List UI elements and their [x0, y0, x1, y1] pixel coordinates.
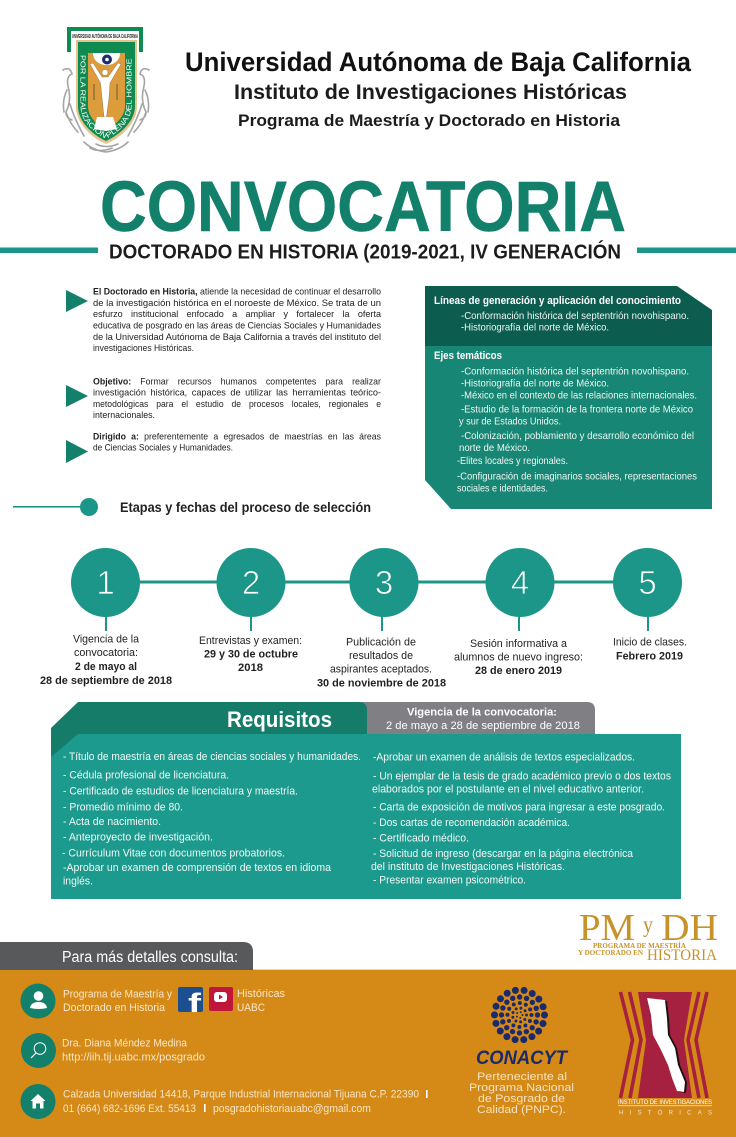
step 4: 4	[511, 564, 529, 601]
logo: PMyDH	[578, 907, 718, 964]
text: direccion: posgradohistoriauabc@gmail.com	[213, 1103, 371, 1115]
text: contacto: Dra. Diana Méndez Medina	[62, 1038, 188, 1050]
text: dirigido: de Ciencias Sociales y Humanidades.	[93, 442, 233, 452]
text: doctorado: investigaciones Históricas.	[93, 343, 194, 353]
text: dirigido: Dirigido a: preferentemente a egresados de maestrías en las áreas	[93, 432, 381, 442]
logo: instituto: HISTÓRICAS	[619, 1110, 712, 1116]
step 1	[40, 548, 172, 687]
footer	[0, 942, 736, 1137]
timeline	[40, 548, 687, 690]
step 1: 28 de septiembre de 2018	[40, 675, 172, 687]
icon: arrow	[66, 385, 88, 407]
logo: CONACYT: Calidad (PNPC).	[477, 1104, 566, 1116]
list: ejes: norte de México.	[459, 442, 530, 454]
text: doctorado	[93, 286, 382, 353]
text: direccion: 01 (664) 682-1696 Ext. 55413	[63, 1103, 196, 1115]
text: doctorado: esfurzo institucional enfocado a ampliar y fortalecer la oferta	[93, 309, 382, 319]
step 5: Inicio de clases.	[613, 636, 687, 648]
step 3: resultados de	[349, 650, 413, 662]
title: CONVOCATORIA	[100, 168, 626, 247]
text: objetivo: investigación histórica, capaces de utilizar las herramientas teórico-	[93, 388, 381, 398]
list: ejes	[457, 366, 697, 494]
tab: vigencia	[360, 702, 595, 735]
program name: Programa de Maestría y Doctorado en Historia	[238, 111, 621, 130]
text: contacto	[62, 1038, 205, 1064]
step 5: 5	[638, 564, 657, 601]
logo: CONACYT: CONACYT	[476, 1048, 568, 1069]
step 4	[454, 548, 583, 677]
text: doctorado: de la Universidad Autónoma de Baja California a través del instituto del	[93, 332, 381, 342]
list: lineas	[461, 310, 689, 334]
list: right requirements: - Carta de exposición de motivos para ingresar a este posgrado.	[373, 802, 665, 814]
list: ejes: -Colonización, poblamiento y desarrollo económico del	[461, 430, 694, 442]
icon: facebook	[178, 987, 203, 1018]
section heading: etapas: Etapas y fechas del proceso de selección	[120, 500, 371, 515]
list: ejes: -Conformación histórica del septentrión novohispano.	[461, 366, 689, 378]
logo: instituto: INSTITUTO DE INVESTIGACIONES	[618, 1099, 712, 1106]
heading: lineas: Líneas de generación y aplicación del conocimiento	[434, 295, 681, 307]
text: objetivo: metodológicas para el estudio de procesos locales, regionales e	[93, 399, 381, 409]
list: right requirements: - Un ejemplar de la tesis de grado académico previo o dos textos	[373, 770, 671, 782]
list: left requirements: - Acta de nacimiento.	[63, 816, 161, 828]
icon: facebook: f	[188, 988, 202, 1018]
icon: home	[20, 1084, 56, 1119]
step 3: 30 de noviembre de 2018	[317, 678, 446, 690]
step 1: 2 de mayo al	[75, 661, 137, 673]
list: left requirements: - Promedio mínimo de 80.	[63, 802, 183, 814]
logo: CONACYT: de Posgrado de	[478, 1093, 565, 1105]
icon: UABC shield logo: UNIVERSIDAD AUTÓNOMA DE BAJA CALIFORNIA	[72, 32, 138, 40]
logo: CONACYT	[469, 990, 574, 1116]
list: ejes: -Elites locales y regionales.	[457, 455, 568, 467]
list: ejes: -Historiografía del norte de México.	[461, 378, 609, 390]
text: programa	[63, 988, 172, 1014]
step 3: 3	[375, 564, 393, 601]
text: historicas: Históricas	[237, 988, 285, 1000]
step 4: 28 de enero 2019	[475, 665, 562, 677]
list: left requirements: - Certificado de estudios de licenciatura y maestría.	[63, 786, 298, 798]
list: ejes: -Estudio de la formación de la frontera norte de México	[461, 404, 693, 416]
list: right requirements: -Aprobar un examen de análisis de textos especializados.	[373, 752, 635, 764]
logo: PMyDH: DH	[661, 907, 718, 949]
step 3: aspirantes aceptados.	[330, 664, 432, 676]
logo: PMyDH: PM	[579, 907, 635, 949]
list: ejes: -México en el contexto de las relaciones internacionales.	[461, 390, 697, 402]
logo: instituto	[618, 992, 712, 1116]
step 1: Vigencia de la	[73, 634, 140, 646]
step 3: Publicación de	[346, 636, 416, 648]
institute name: Instituto de Investigaciones Históricas	[234, 81, 627, 104]
logo: PMyDH: HISTORIA	[647, 947, 717, 964]
tab: mas detalles	[0, 942, 253, 970]
step 2: 2	[242, 564, 260, 601]
logo: PMyDH: Y DOCTORADO EN	[578, 948, 644, 957]
logo: PMyDH: y	[643, 912, 653, 937]
list: right requirements: del instituto de Investigaciones Históricas.	[371, 861, 565, 873]
step 4: alumnos de nuevo ingreso:	[454, 652, 583, 664]
text: dirigido	[93, 432, 381, 452]
text: direccion: Calzada Universidad 14418, Parque Industrial Internacional Tijuana C.P. 22390	[63, 1088, 419, 1100]
heading: requisitos	[51, 702, 367, 757]
list: left requirements: - Título de maestría en áreas de ciencias sociales y humanidades.	[63, 751, 361, 763]
icon: UABC shield logo	[62, 27, 150, 153]
logo: CONACYT: Programa Nacional	[469, 1082, 574, 1094]
subtitle with side bars: DOCTORADO EN HISTORIA (2019-2021, IV GENERACIÓN	[109, 240, 621, 264]
list: left requirements: -Aprobar un examen de comprensión de textos en idioma	[63, 862, 332, 874]
text: objetivo: internacionales.	[93, 410, 155, 420]
header text	[185, 47, 692, 130]
icon: arrow	[66, 440, 88, 463]
text: historicas: UABC	[237, 1002, 265, 1014]
tab: vigencia: Vigencia de la convocatoria:	[407, 706, 557, 718]
section heading: etapas	[13, 498, 371, 516]
icon: person	[20, 984, 56, 1018]
list: left requirements	[62, 751, 361, 888]
text: objetivo: Objetivo: Formar recursos humanos competentes para realizar	[93, 376, 381, 386]
list: left requirements: inglés.	[63, 876, 93, 888]
step 3	[317, 548, 446, 690]
logo: PMyDH: PROGRAMA DE MAESTRÍA	[593, 940, 687, 950]
step 1: 1	[96, 564, 115, 601]
icon: youtube	[209, 987, 233, 1011]
heading: ejes: Ejes temáticos	[434, 350, 502, 362]
tab: mas detalles: Para más detalles consulta:	[62, 949, 238, 966]
step 5: Febrero 2019	[616, 650, 683, 662]
list: ejes: y sur de Estados Unidos.	[459, 416, 561, 428]
step 2	[199, 548, 302, 674]
icon: UABC shield logo: POR LA REALIZACIÓN PLENA DEL HOMBRE	[80, 56, 132, 138]
list: left requirements: - Cédula profesional de licenciatura.	[63, 770, 229, 782]
step 2: 29 y 30 de octubre	[204, 648, 298, 660]
heading: requisitos: Requisitos	[227, 707, 332, 732]
list: left requirements: - Anteproyecto de investigación.	[63, 832, 213, 844]
text: programa: Programa de Maestría y	[63, 988, 172, 1000]
list: ejes: sociales e identidades.	[457, 482, 548, 494]
list: right requirements: - Presentar examen psicométrico.	[373, 874, 526, 886]
list: right requirements: - Dos cartas de recomendación académica.	[373, 817, 570, 829]
tab: vigencia: 2 de mayo a 28 de septiembre de 2018	[386, 720, 580, 732]
text: doctorado: de la investigación histórica en el noroeste de México. Se trata de un	[93, 298, 381, 308]
text: doctorado: educativa de posgrado en las áreas de Ciencias Sociales y Humanidades	[93, 320, 381, 330]
list: right requirements: elaborados por el postulante en el nivel educativo anterior.	[372, 784, 644, 796]
list: right requirements	[371, 752, 671, 886]
text: historicas	[237, 988, 285, 1014]
text: objetivo	[93, 376, 381, 420]
icon: arrow	[66, 290, 88, 312]
step 2: 2018	[238, 662, 263, 674]
university name: Universidad Autónoma de Baja California	[185, 47, 692, 77]
list: right requirements: - Certificado médico.	[373, 832, 469, 844]
list: lineas: -Conformación histórica del septentrión novohispano.	[461, 310, 689, 322]
list: lineas: -Historiografía del norte de México.	[461, 322, 609, 334]
intro block	[66, 286, 382, 463]
list: ejes: -Configuración de imaginarios sociales, representaciones	[457, 470, 697, 482]
logo: CONACYT: Perteneciente al	[477, 1071, 567, 1083]
panel: lineas y ejes	[425, 286, 712, 509]
step 1: convocatoria:	[74, 647, 138, 659]
text: programa: Doctorado en Historia	[63, 1002, 166, 1014]
step 2: Entrevistas y examen:	[199, 635, 302, 647]
step 4: Sesión informativa a	[470, 638, 568, 650]
list: left requirements: - Currículum Vitae con documentos probatorios.	[62, 848, 285, 860]
list: right requirements: - Solicitud de ingreso (descargar en la página electrónica	[373, 848, 634, 860]
text: doctorado: El Doctorado en Historia, atiende la necesidad de continuar el desarrollo	[93, 286, 381, 296]
text: direccion	[63, 1088, 428, 1115]
subtitle with side bars	[0, 240, 736, 264]
text: contacto: http://iih.tij.uabc.mx/posgrado	[62, 1052, 205, 1064]
icon: search	[21, 1033, 56, 1068]
step 5	[613, 548, 687, 662]
panel: requisitos	[51, 702, 681, 899]
